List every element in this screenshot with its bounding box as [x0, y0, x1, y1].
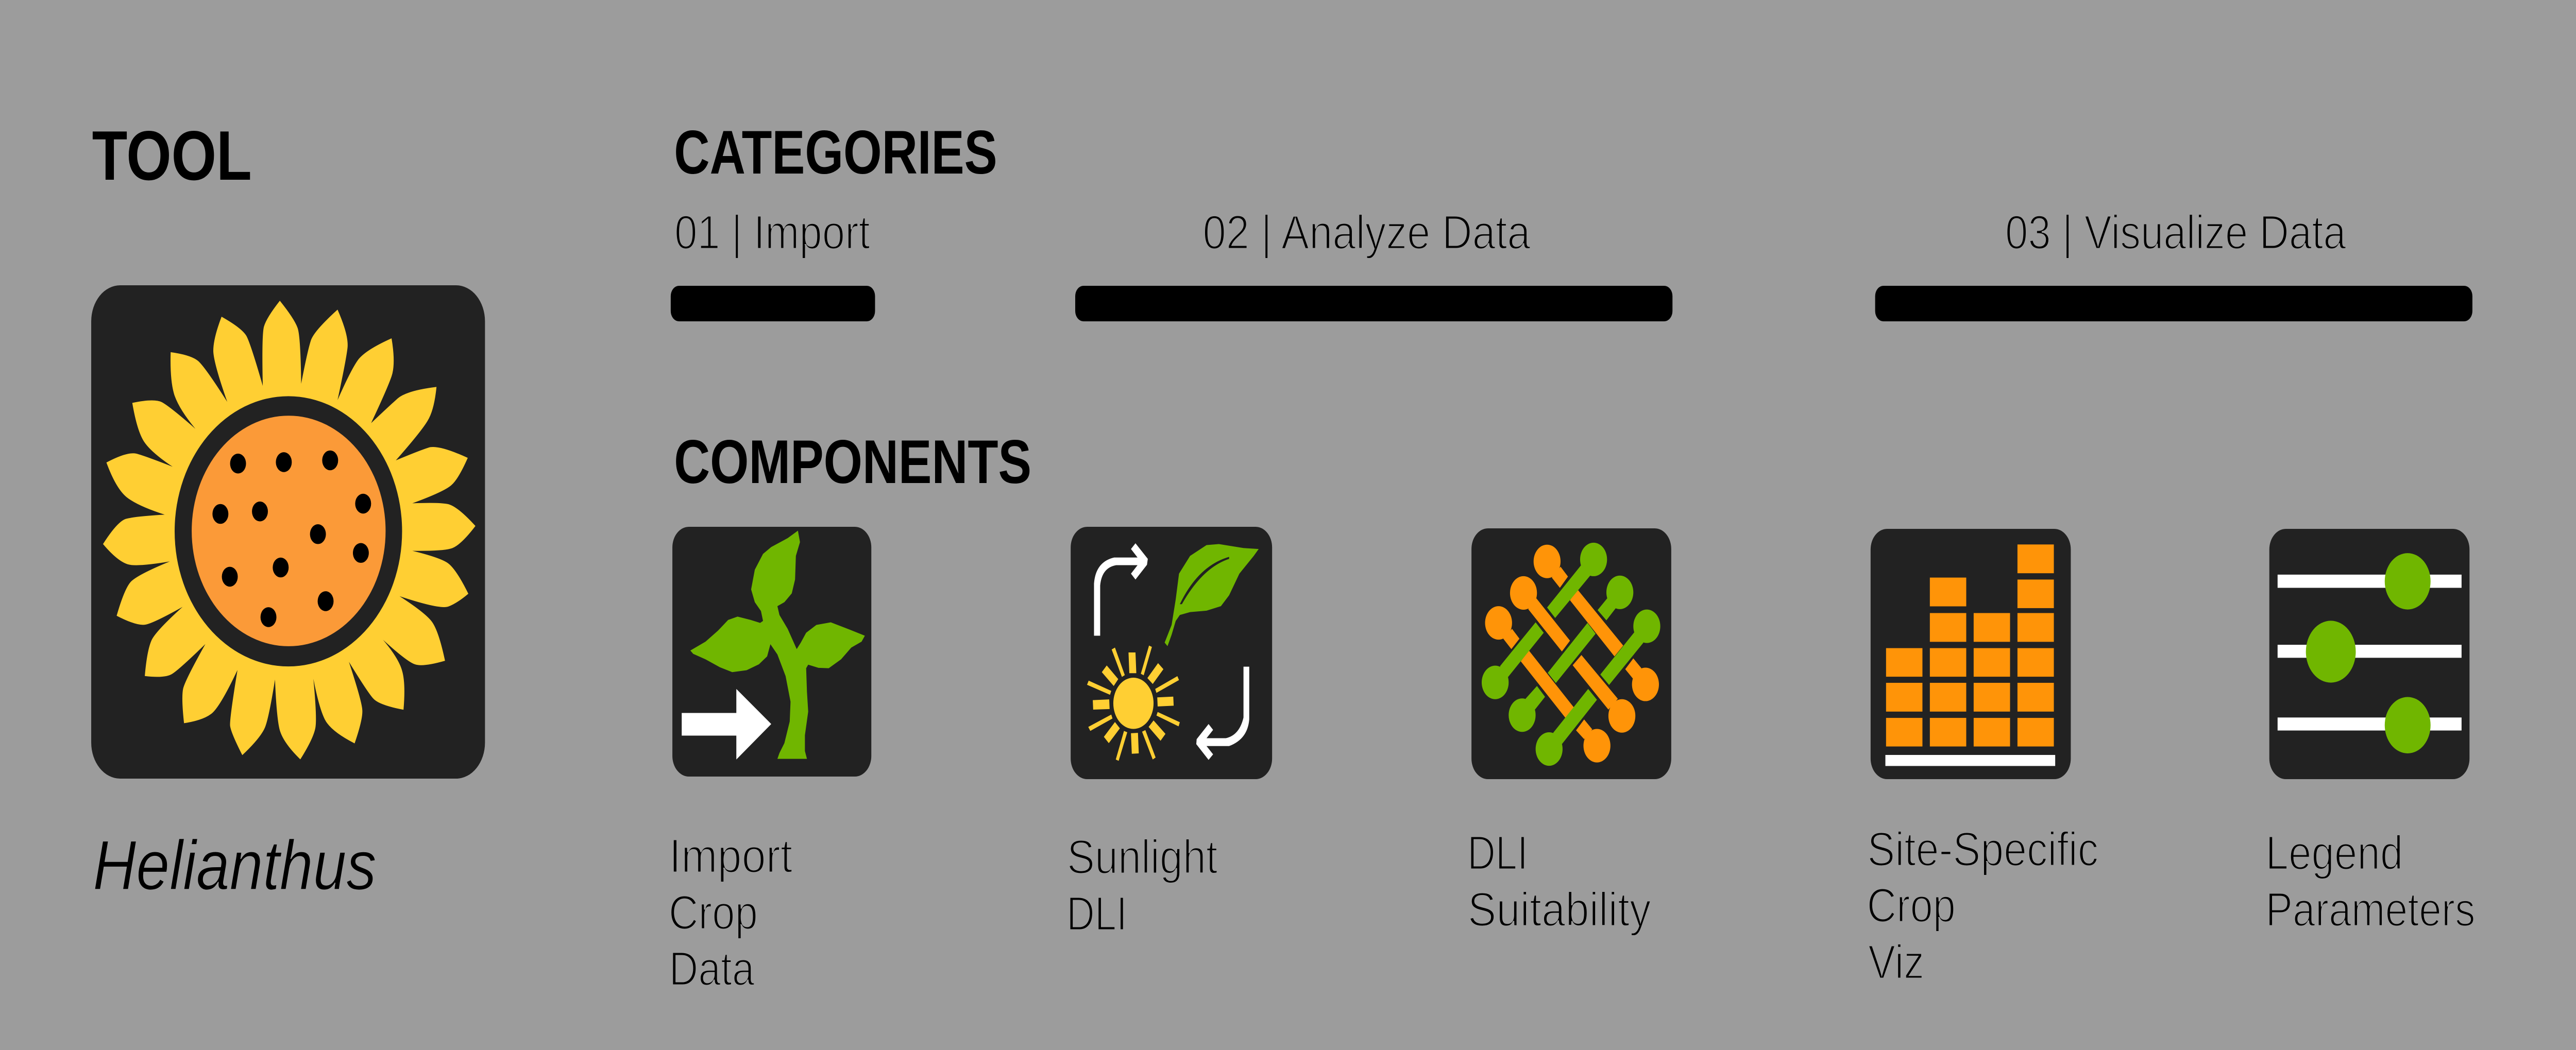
tool name: Helianthus — [93, 826, 377, 905]
icon: legend parameters — [2269, 529, 2469, 779]
heading: tool: TOOL — [92, 116, 252, 195]
sun — [1087, 646, 1180, 761]
icon: sunflower tool logo — [91, 285, 485, 779]
label: DLI suitability: Suitability — [1468, 883, 1651, 936]
label: import crop data: Crop — [669, 886, 758, 939]
slider 1 — [2278, 553, 2462, 610]
label: site-specific crop viz: Crop — [1867, 879, 1956, 932]
label: import crop data — [669, 829, 792, 995]
icon: sunlight DLI — [1071, 527, 1272, 779]
label: site-specific crop viz: Viz — [1868, 935, 1924, 989]
label: site-specific crop viz: Site-Specific — [1867, 822, 2098, 876]
heading: components: COMPONENTS — [674, 428, 1031, 496]
label: DLI suitability — [1467, 826, 1651, 936]
category label 03: 03 | Visualize Data — [2005, 205, 2346, 259]
label: legend parameters: Legend — [2266, 826, 2403, 880]
label: site-specific crop viz — [1867, 822, 2098, 989]
category label 02: 02 | Analyze Data — [1203, 205, 1531, 259]
label: sunlight DLI: DLI — [1066, 887, 1127, 940]
leaf — [1165, 544, 1259, 646]
heading: categories: CATEGORIES — [674, 118, 997, 187]
cycle arrow top — [1094, 543, 1148, 635]
category bar 01 — [671, 286, 875, 321]
bar chart blocks — [1886, 544, 2054, 747]
icon: DLI suitability — [1471, 528, 1671, 779]
import arrow — [682, 689, 771, 760]
orange weave — [1485, 545, 1659, 763]
label: DLI suitability: DLI — [1467, 826, 1528, 880]
label: sunlight DLI — [1066, 830, 1217, 940]
category bar 03 — [1875, 286, 2472, 321]
sunflower seed head — [192, 416, 385, 646]
icon: site-specific crop viz — [1871, 529, 2071, 779]
slider 2 — [2278, 621, 2462, 683]
slider 3 — [2278, 697, 2462, 753]
cycle arrow bottom — [1196, 667, 1249, 760]
sunflower ring — [175, 396, 402, 666]
category label 01: 01 | Import — [674, 205, 870, 259]
category bar 02 — [1075, 286, 1672, 321]
green weave — [1482, 543, 1660, 766]
label: import crop data: Import — [669, 829, 792, 883]
chart baseline — [1885, 755, 2055, 766]
label: sunlight DLI: Sunlight — [1067, 830, 1217, 884]
label: legend parameters: Parameters — [2266, 883, 2476, 936]
icon: import crop data — [672, 527, 871, 777]
label: import crop data: Data — [669, 942, 755, 995]
label: legend parameters — [2266, 826, 2476, 936]
sunflower petals — [103, 301, 476, 760]
seedling — [690, 531, 865, 759]
